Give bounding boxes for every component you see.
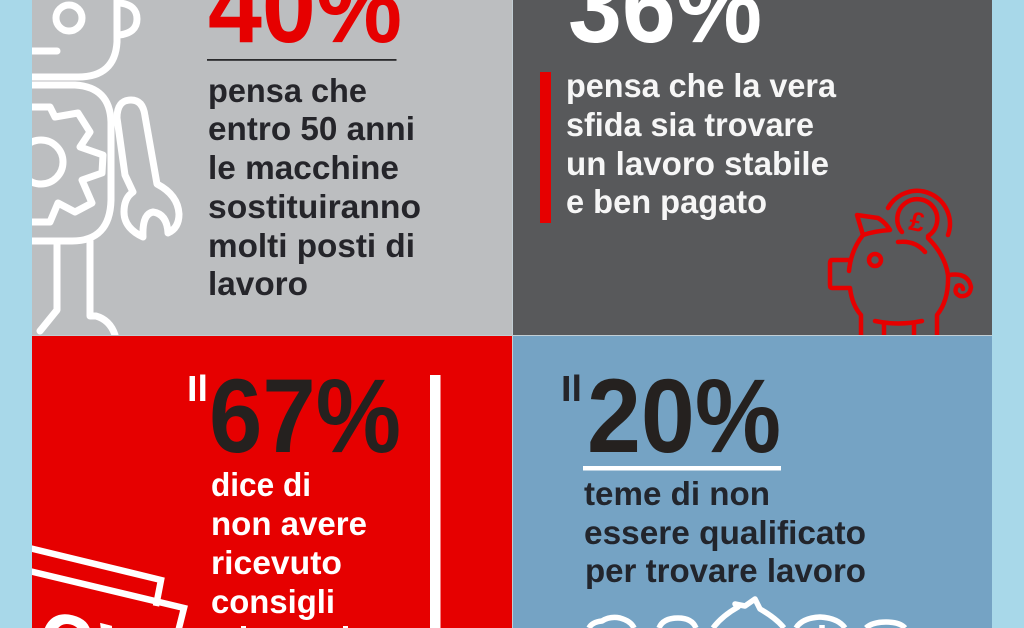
accent bar [540, 72, 551, 223]
text: qualified description: teme di non [584, 475, 770, 512]
text: qualified description [584, 475, 866, 589]
text: machines description: molti posti di [208, 227, 415, 264]
text: stable job description: e ben pagato [566, 183, 767, 220]
text: machines description [208, 72, 421, 302]
panel: 36 percent stable job [513, 0, 992, 335]
text: advice description: ricevuto [211, 544, 342, 581]
text: machines description: pensa che [208, 72, 367, 109]
icon: CV documents [25, 547, 184, 628]
statistic: 67%: 67% [209, 358, 401, 475]
rule [207, 59, 396, 61]
statistic: 20%: 20% [587, 358, 781, 475]
icon: row of people heads [589, 599, 905, 628]
word: Il: Il [561, 368, 582, 409]
text: machines description: sostituiranno [208, 188, 421, 225]
text: machines description: lavoro [208, 265, 308, 302]
text: stable job description: sfida sia trovare [566, 106, 814, 143]
text: advice description: dice di [211, 466, 311, 503]
text: advice description: non avere [211, 505, 367, 542]
text: stable job description [566, 67, 837, 220]
panel: 40 percent machines [19, 0, 512, 335]
text: stable job description: un lavoro stabile [566, 145, 829, 182]
text: machines description: entro 50 anni [208, 110, 415, 147]
text: qualified description: per trovare lavoro [585, 552, 866, 589]
word: Il: Il [187, 368, 208, 409]
text: machines description: le macchine [208, 149, 399, 186]
text: qualified description: essere qualificato [584, 514, 866, 551]
icon: pound sign: £ [907, 206, 927, 238]
rule [583, 466, 781, 470]
panel: 67 percent advice [25, 336, 512, 628]
text: advice description: consigli [211, 583, 335, 620]
icon: piggy bank [830, 191, 971, 335]
icon: robot [19, 0, 179, 335]
tops of the cropped next text line [241, 626, 348, 628]
panel: 20 percent qualified [513, 336, 992, 628]
text: advice description [211, 466, 367, 620]
text: stable job description: pensa che la vera [566, 67, 837, 104]
accent bar [430, 375, 440, 628]
